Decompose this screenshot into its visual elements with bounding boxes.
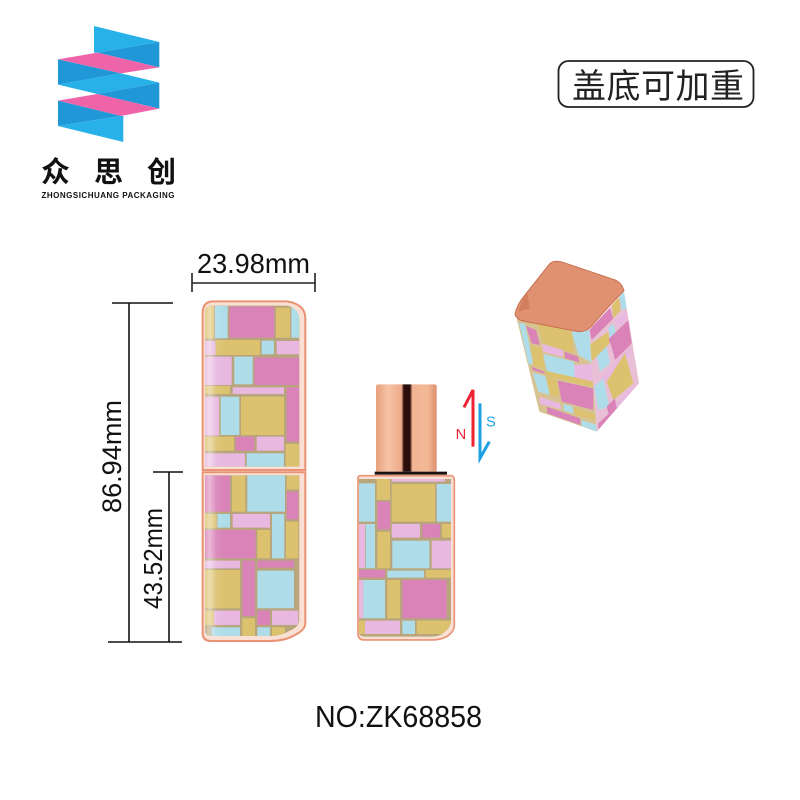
black collar [375,472,447,475]
logo mark [58,26,159,142]
width dimension 23.98mm: 23.98mm [197,248,310,279]
closed tube: cap [203,301,305,470]
closed lipstick tube [203,301,305,641]
height dimension 86.94mm: 86.94mm [97,400,127,513]
tilted cap: right face [589,292,639,432]
inner rose gold bullet sleeve [376,384,437,472]
south arrow: S [486,415,496,431]
height dimension 43.52mm [138,472,183,642]
width dimension 23.98mm [192,248,315,292]
height dimension 86.94mm [97,303,182,642]
tilted cap: left face [517,318,598,432]
badge: cap bottom can be weighted: 盖底可加重 [572,68,744,106]
logo english name: ZHONGSICHUANG PACKAGING [42,191,174,200]
open tube body [358,476,454,640]
product number: NO:ZK68858 [315,699,482,734]
closed tube: base [203,472,305,641]
open lipstick tube [358,384,454,640]
magnet polarity arrows [456,390,496,458]
height dimension 43.52mm: 43.52mm [138,508,168,609]
logo [41,26,176,200]
tilted cap: rose gold top [515,261,624,332]
north arrow: N [456,427,466,443]
tilted cap view [515,261,639,432]
logo chinese name: 众思创 [41,156,176,189]
